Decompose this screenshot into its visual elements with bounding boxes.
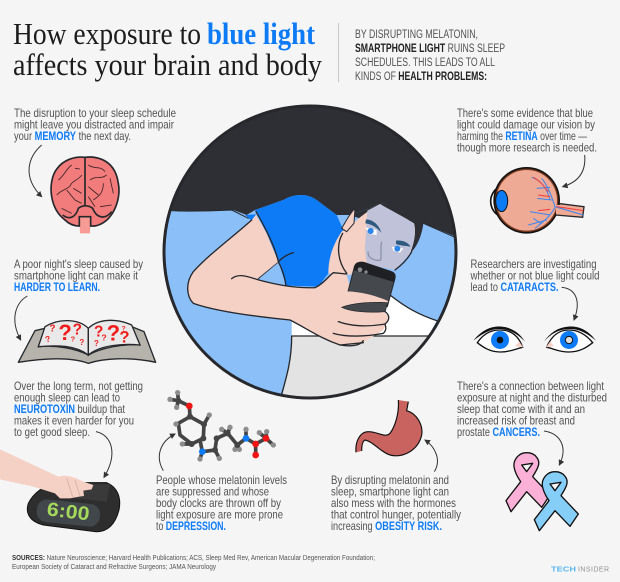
text: obesity: that control hunger, potentially — [331, 508, 461, 522]
text: depression — [156, 474, 287, 533]
text: learning — [14, 258, 143, 294]
text: memory — [14, 107, 176, 143]
icon: open book with question marks: ? — [107, 321, 120, 346]
text: neurotoxin: NEUROTOXIN buildup that — [14, 403, 126, 416]
text: neurotoxin: to get good sleep. — [14, 426, 90, 439]
text: cataracts: lead to CATARACTS. — [470, 281, 558, 294]
blue ribbon — [534, 472, 578, 531]
arrow: obesity — [425, 440, 437, 472]
icon: pair of eyes — [473, 327, 596, 352]
central illustration: person using phone in bed — [160, 100, 460, 407]
text: neurotoxin — [14, 380, 143, 439]
text: retina: light could damage our vision by — [457, 118, 595, 132]
arrow: cataracts — [562, 287, 577, 320]
icon: alarm clock with hand — [0, 449, 120, 532]
text: memory: The disruption to your sleep schedule — [14, 107, 176, 120]
text: obesity: By disrupting melatonin and — [331, 474, 449, 487]
arrow: retina — [563, 155, 585, 187]
icon: open book with question marks: ? — [94, 339, 99, 348]
title — [13, 16, 322, 82]
intro text: KINDS OF HEALTH PROBLEMS: — [355, 69, 487, 83]
icon: alarm clock with hand: 6:00 — [46, 499, 91, 525]
icon: eyeball with retina — [491, 167, 584, 234]
text: obesity: increasing OBESITY RISK. — [331, 520, 442, 533]
icon: stomach — [356, 400, 422, 456]
icon: melatonin molecule — [167, 390, 276, 462]
text: cancers — [457, 380, 607, 439]
arrow: cancers — [544, 431, 563, 465]
arrow: neurotoxin — [96, 432, 112, 477]
text: neurotoxin: makes it even harder for you — [14, 414, 134, 428]
text: learning: A poor night's sleep caused by — [14, 258, 143, 271]
intro text — [355, 27, 505, 83]
icon: open book with question marks: ? — [101, 333, 107, 343]
text: cancers: prostate CANCERS. — [457, 426, 540, 439]
title: blue light — [207, 16, 316, 51]
text: retina — [457, 107, 597, 154]
icon: brain — [51, 157, 119, 233]
sources: SOURCES: Nature Neuroscience; Harvard Health Publications; ACS, Sleep Med Rev, American Macular Degeneration Foundation; — [12, 553, 375, 562]
sources: European Society of Cataract and Refractive Surgeons; JAMA Neurology — [12, 562, 216, 571]
text: depression: People whose melatonin levels — [156, 474, 287, 487]
text: depression: are suppressed and whose — [156, 486, 269, 498]
intro text: SMARTPHONE LIGHT RUINS SLEEP — [355, 41, 505, 55]
pink ribbon — [506, 453, 550, 512]
arrow: learning — [15, 296, 27, 340]
title: How exposure to — [13, 16, 201, 51]
icon: open book with question marks: ? — [119, 328, 130, 347]
logo: Tech Insider — [551, 566, 609, 574]
title: affects your brain and body — [13, 47, 322, 82]
left eye — [473, 327, 525, 352]
icon: open book with question marks: ? — [94, 324, 103, 341]
text: obesity: also mess with the hormones — [331, 497, 456, 510]
text: memory: your MEMORY the next day. — [14, 130, 131, 143]
text: depression: to DEPRESSION. — [156, 520, 226, 533]
logo: Tech Insider: TECH — [551, 566, 576, 574]
logo: Tech Insider: INSIDER — [578, 566, 609, 574]
icon: open book with question marks: ? — [49, 324, 55, 335]
text: cataracts — [470, 258, 600, 294]
arrow: depression — [159, 434, 175, 471]
icon: open book with question marks: ? — [73, 321, 82, 338]
text: retina: There's some evidence that blue — [457, 107, 593, 120]
text: learning: HARDER TO LEARN. — [14, 281, 100, 294]
icon: open book with question marks: ? — [71, 335, 76, 344]
text: neurotoxin: enough sleep can lead to — [14, 392, 120, 404]
text: cataracts: Researchers are investigating — [470, 258, 596, 271]
icon: open book with question marks: ? — [58, 320, 72, 345]
text: cancers: sleep that come with it and an — [457, 403, 585, 416]
text: obesity: sleep, smartphone light can — [331, 486, 449, 498]
icon: open book with question marks — [18, 320, 156, 363]
text: depression: light exposure are more prone — [156, 508, 283, 522]
text: neurotoxin: Over the long term, not getting — [14, 380, 143, 393]
sources — [12, 553, 375, 571]
intro text: SCHEDULES. THIS LEADS TO ALL — [355, 55, 495, 69]
arrow: memory — [29, 145, 42, 197]
text: depression: body clocks are thrown off by — [156, 497, 281, 510]
text: cancers: increased risk of breast and — [457, 414, 575, 428]
icon: open book with question marks: ? — [44, 334, 52, 345]
text: learning: smartphone light can make it — [14, 270, 139, 282]
icon: open book with question marks: ? — [122, 326, 126, 333]
text: retina: harming the RETINA over time — — [457, 130, 587, 143]
right eye — [544, 327, 596, 352]
intro text: BY DISRUPTING MELATONIN, — [355, 27, 478, 41]
text: memory: might leave you distracted and impair — [14, 118, 174, 132]
text: obesity — [331, 474, 461, 533]
icon: open book with question marks: ? — [79, 338, 84, 347]
icon: awareness ribbons — [506, 453, 578, 531]
